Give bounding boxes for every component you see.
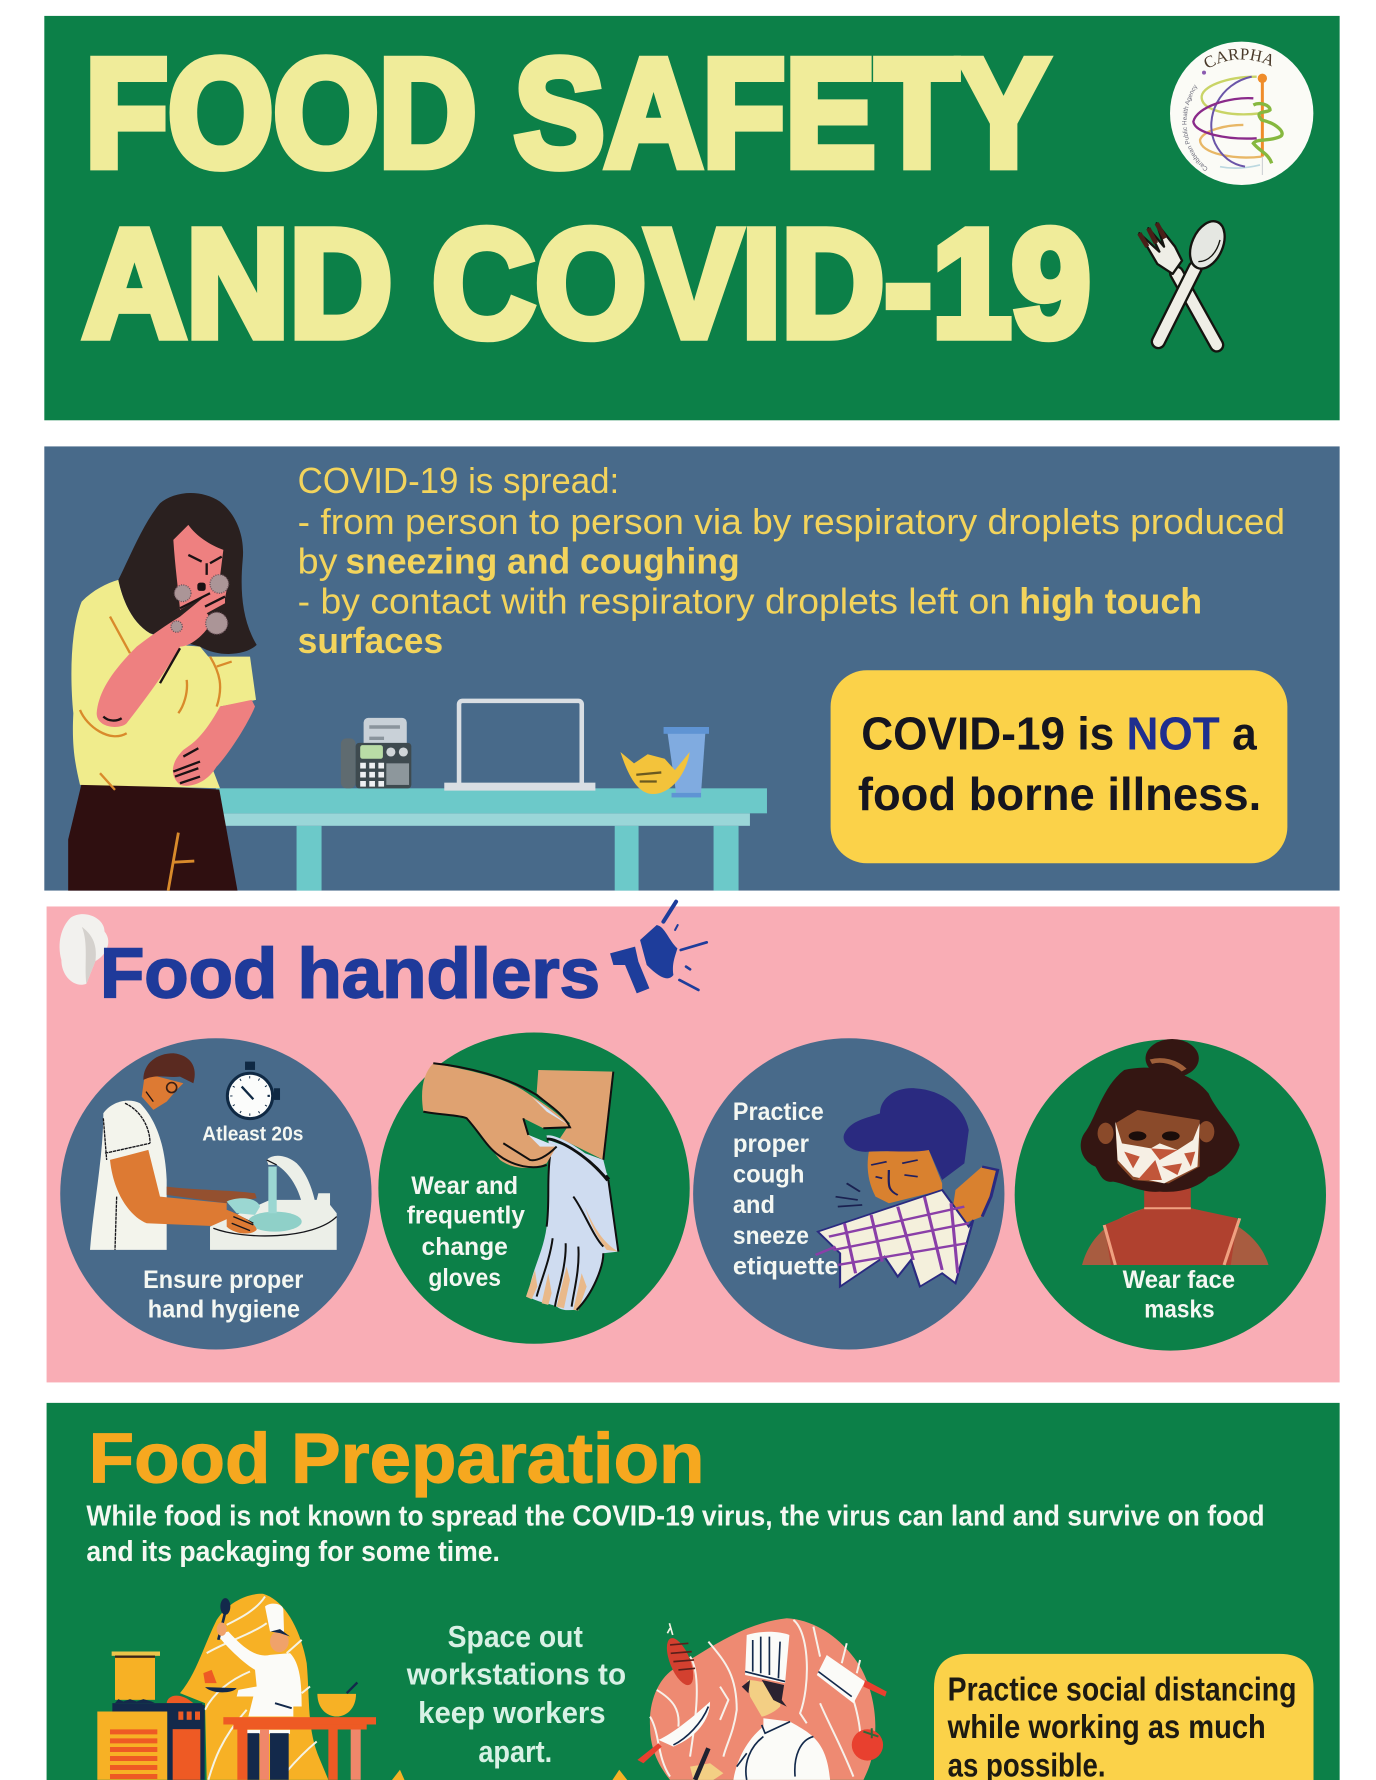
text block: spread explanation: sneezing and coughing (345, 541, 740, 582)
label: wear face masks: masks (1144, 1296, 1215, 1324)
callout: social distancing: while working as much (947, 1708, 1266, 1745)
label: ensure proper hand hygiene: hand hygiene (148, 1296, 300, 1324)
label: cough etiquette: proper (733, 1130, 809, 1158)
label: cough etiquette: Practice (733, 1098, 824, 1126)
label: wear face masks: Wear face (1123, 1266, 1235, 1294)
icon: telephone (341, 718, 411, 788)
title: FOOD SAFETY (85, 27, 1049, 199)
illustration: man sneezing into cloth (816, 1088, 998, 1287)
panel: title banner (44, 16, 1340, 420)
icon: laptop (444, 701, 595, 791)
text block: spread explanation: high touch (1019, 580, 1202, 621)
label: cough etiquette: cough (733, 1161, 804, 1189)
label: cough etiquette: etiquette (733, 1253, 839, 1281)
icon: CARPHA logo: CARPHA (1204, 48, 1272, 68)
icon: bowl and cup (620, 727, 709, 797)
heading: food preparation: Food Preparation (89, 1418, 704, 1497)
label: wear gloves: gloves (428, 1264, 501, 1292)
callout: not a food borne illness: food borne illness. (858, 768, 1261, 820)
panel: food preparation (47, 1403, 1340, 1780)
illustration: man washing hands (90, 1053, 337, 1250)
title (83, 27, 1091, 369)
label: wear gloves: frequently (407, 1201, 525, 1229)
card: face masks (1015, 1039, 1326, 1351)
illustration: woman wearing mask (1081, 1039, 1269, 1265)
panel: food handlers (47, 902, 1340, 1382)
callout: social distancing (934, 1654, 1314, 1780)
text block: spread explanation: - from person to person via by respiratory droplets produced (298, 501, 1285, 542)
callout: social distancing: Practice social distancing (948, 1670, 1296, 1707)
card: cough etiquette (693, 1038, 1004, 1349)
label: cough etiquette: sneeze (733, 1222, 809, 1250)
text block: space out workstations: workstations to (406, 1658, 626, 1692)
text block: intro: While food is not known to spread the COVID-19 virus, the virus can land and survive on food (86, 1501, 1265, 1533)
icon: chef hat (60, 914, 108, 985)
title: AND COVID-19 (83, 197, 1091, 369)
icon: small orange markers (392, 1770, 627, 1780)
icon: CARPHA logo: Caribbean Public Health Agency (1182, 84, 1208, 171)
label: wear gloves: change (422, 1233, 508, 1261)
label: ensure proper hand hygiene (143, 1266, 304, 1324)
label: at least 20s: Atleast 20s (202, 1122, 303, 1145)
icon: megaphone (610, 902, 707, 993)
label: wear gloves (407, 1172, 525, 1292)
text block: spread explanation: by (298, 541, 338, 582)
illustration: cook at stove (97, 1594, 376, 1780)
text block: spread explanation: surfaces (298, 620, 443, 661)
label: cough etiquette (733, 1098, 839, 1281)
illustration: coughing woman (68, 493, 257, 891)
callout: not a food borne illness (831, 670, 1287, 863)
card: hand hygiene (60, 1038, 372, 1349)
label: wear face masks (1123, 1266, 1235, 1324)
text block: spread explanation: COVID-19 is spread: (298, 460, 619, 501)
text block: spread explanation: - by contact with respiratory droplets left on (298, 580, 1010, 621)
text block: space out workstations: apart. (478, 1735, 552, 1769)
text block: space out workstations: keep workers (418, 1696, 606, 1730)
illustration: table (216, 788, 767, 891)
card: gloves (378, 1033, 690, 1344)
label: ensure proper hand hygiene: Ensure proper (143, 1266, 304, 1294)
label: wear gloves: Wear and (411, 1172, 518, 1200)
callout: not a food borne illness: COVID-19 is NOT a (861, 708, 1258, 760)
text block: space out workstations: Space out (448, 1620, 583, 1654)
icon: fork and spoon (1139, 216, 1232, 345)
text block: spread explanation (298, 460, 1285, 661)
heading: food handlers: Food handlers (100, 933, 600, 1012)
text block: space out workstations (406, 1620, 626, 1769)
icon: stopwatch (227, 1062, 280, 1119)
illustration: hands pulling on a glove (422, 1063, 618, 1311)
text block: intro (86, 1501, 1265, 1568)
icon: CARPHA logo (1170, 42, 1314, 185)
illustration: chef with knives (637, 1618, 887, 1780)
label: cough etiquette: and (733, 1191, 775, 1219)
panel: how COVID-19 spreads (44, 446, 1340, 891)
text block: intro: and its packaging for some time. (86, 1536, 500, 1568)
